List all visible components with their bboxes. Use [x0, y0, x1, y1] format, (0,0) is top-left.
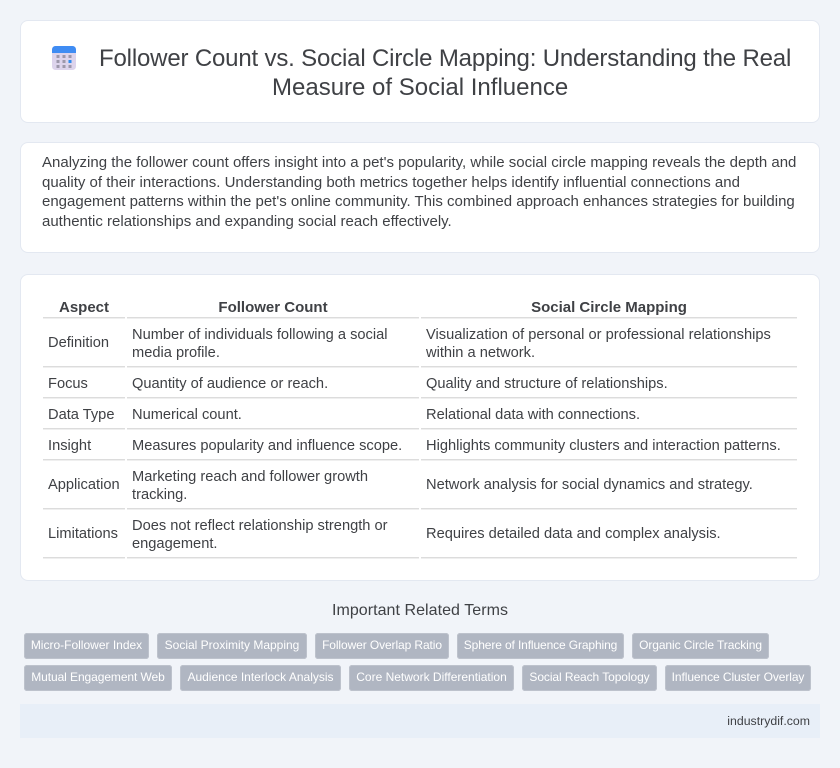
row: definition: media profile. — [132, 345, 220, 361]
tag — [349, 665, 514, 691]
row: definition: Definition — [48, 335, 109, 351]
row: data type: Numerical count. — [132, 407, 242, 423]
tag: Sphere of Influence Graphing — [464, 638, 617, 652]
tags: related terms — [24, 633, 811, 691]
row: application: Marketing reach and follower growth — [132, 469, 368, 485]
row: insight: Highlights community clusters and interaction patterns. — [426, 438, 781, 454]
tag: Mutual Engagement Web — [31, 670, 165, 684]
table header: Follower Count — [218, 299, 328, 316]
row: application: Application — [48, 477, 120, 493]
row: definition: Visualization of personal or professional relationships — [426, 327, 771, 343]
row: focus: Quantity of audience or reach. — [132, 376, 328, 392]
panel: description — [20, 142, 820, 253]
tag: Core Network Differentiation — [356, 670, 507, 684]
row: definition: Number of individuals following a social — [132, 327, 388, 343]
row: insight — [43, 438, 797, 461]
tag — [157, 633, 307, 659]
text block: intro: engagement patterns within the pet's online community. This combined approach enhances strategies for building — [42, 193, 795, 210]
table header: Aspect — [59, 299, 109, 316]
tag — [180, 665, 341, 691]
tag — [24, 633, 149, 659]
table header — [43, 299, 797, 319]
row: data type — [43, 407, 797, 430]
row: focus: Quality and structure of relationships. — [426, 376, 668, 392]
title: Follower Count vs. Social Circle Mapping: Understanding the Real — [99, 45, 791, 72]
row: limitations: Limitations — [48, 526, 118, 542]
tag: Follower Overlap Ratio — [322, 638, 442, 652]
heading: related terms: Important Related Terms — [332, 602, 508, 619]
footer source text: industrydif.com — [727, 714, 810, 728]
table header: Social Circle Mapping — [531, 299, 687, 316]
title: Measure of Social Influence — [272, 74, 568, 101]
tag: Audience Interlock Analysis — [187, 670, 334, 684]
row: definition: within a network. — [426, 345, 535, 361]
row: limitations: Requires detailed data and complex analysis. — [426, 526, 721, 542]
row: data type: Relational data with connections. — [426, 407, 640, 423]
row: data type: Data Type — [48, 407, 114, 423]
panel: comparison table — [20, 274, 820, 581]
row: limitations — [43, 518, 797, 559]
tag: Social Reach Topology — [529, 670, 650, 684]
title — [99, 45, 791, 101]
tag: Micro-Follower Index — [31, 638, 142, 652]
row: insight: Measures popularity and influence scope. — [132, 438, 402, 454]
row: application: Network analysis for social dynamics and strategy. — [426, 477, 753, 493]
text block: intro: Analyzing the follower count offers insight into a pet's popularity, while social circle mapping reveals the depth and — [42, 154, 796, 171]
text block: intro — [42, 154, 796, 230]
row: definition — [43, 327, 797, 368]
row: limitations: engagement. — [132, 536, 217, 552]
row: insight: Insight — [48, 438, 91, 454]
tag: Social Proximity Mapping — [165, 638, 299, 652]
panel: title card — [20, 20, 820, 123]
footer bar — [20, 704, 820, 738]
row: limitations: Does not reflect relationship strength or — [132, 518, 388, 534]
tag: Influence Cluster Overlay — [672, 670, 804, 684]
tag — [632, 633, 769, 659]
row: focus — [43, 376, 797, 399]
text block: intro: quality of their interactions. Understanding both metrics together helps identify influential connections and — [42, 174, 740, 190]
tag — [457, 633, 624, 659]
tag — [665, 665, 811, 691]
tag — [24, 665, 172, 691]
tag — [315, 633, 449, 659]
row: application: tracking. — [132, 487, 187, 503]
icon: calendar — [52, 46, 76, 70]
tag — [522, 665, 657, 691]
row: focus: Focus — [48, 376, 88, 392]
text block: intro: authentic relationships and expanding social reach effectively. — [42, 212, 452, 230]
tag: Organic Circle Tracking — [639, 638, 762, 652]
row: application — [43, 469, 797, 510]
